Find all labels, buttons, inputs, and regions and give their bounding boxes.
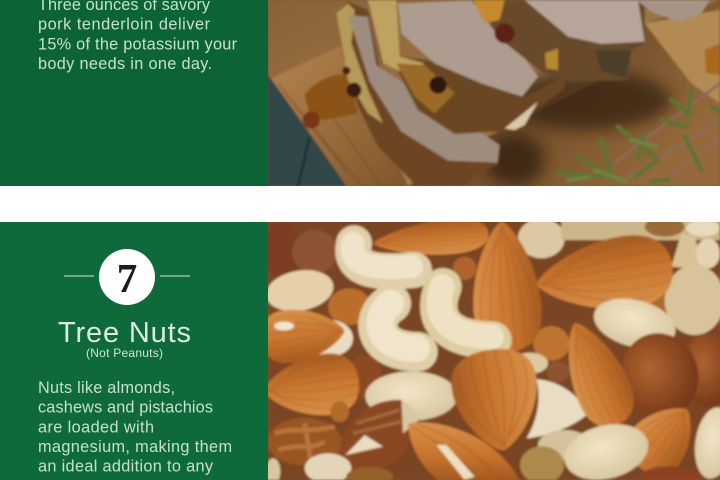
pork description text: pork tenderloin deliver — [38, 16, 211, 34]
cashew centre left — [378, 303, 418, 352]
wood background — [268, 0, 720, 187]
gravy pool — [305, 74, 358, 120]
pecan lower left — [267, 401, 349, 466]
nuts description text — [38, 379, 232, 476]
nuts description text: magnesium, making them — [38, 438, 232, 456]
cashew right — [592, 296, 678, 348]
number badge 7: 7 — [117, 255, 137, 301]
orange almonds behind — [328, 257, 570, 398]
almond top right — [536, 234, 674, 309]
panel: pork tenderloin text — [0, 0, 268, 186]
slice two — [368, 0, 565, 134]
almond centre — [450, 348, 538, 452]
pale cashew far right — [665, 265, 720, 335]
brazil nut left — [268, 268, 336, 312]
back row nuts — [268, 222, 720, 314]
cream nut bottom right — [563, 422, 650, 480]
almond right lower — [634, 406, 692, 472]
nuts description text: Nuts like almonds, — [38, 379, 175, 397]
reddish nut bottom — [639, 466, 700, 480]
split hazelnut — [339, 400, 420, 473]
almond left lower — [268, 352, 360, 417]
nuts description text: are loaded with — [38, 418, 154, 436]
photo: mixed tree nuts — [259, 216, 720, 480]
broken cashew piece — [526, 379, 586, 438]
pork description text: body needs in one day. — [38, 55, 212, 73]
almond left — [268, 308, 346, 364]
subheading: (Not Peanuts) — [86, 346, 163, 360]
nuts description text: cashews and pistachios — [38, 398, 213, 416]
panel: tree nuts text — [0, 222, 268, 480]
pale cashew under left almond — [318, 318, 355, 356]
almond right — [567, 322, 634, 427]
nuts description text: an ideal addition to any — [38, 458, 214, 476]
slice one — [336, 2, 500, 185]
small cashew middle — [511, 353, 548, 374]
pork description text: 15% of the potassium your — [38, 36, 238, 54]
slice four — [636, 0, 710, 22]
almond bottom — [408, 422, 519, 480]
almond top centre — [472, 222, 543, 352]
pork description text — [38, 0, 238, 73]
cashew centre — [439, 287, 493, 340]
beige nuts bottom — [266, 430, 591, 480]
hazelnut far right — [688, 334, 720, 406]
heading: Tree Nuts — [58, 317, 191, 349]
almond top back — [373, 222, 490, 256]
cream nut far right — [691, 405, 720, 480]
photo: sliced pork tenderloin on wooden board — [268, 0, 720, 187]
cashew lower centre — [365, 371, 457, 421]
hazelnut right — [622, 332, 699, 409]
slice three — [471, 0, 645, 82]
thyme sprigs — [558, 83, 720, 182]
number badge 7 — [64, 249, 190, 305]
cashew top left — [352, 243, 414, 271]
